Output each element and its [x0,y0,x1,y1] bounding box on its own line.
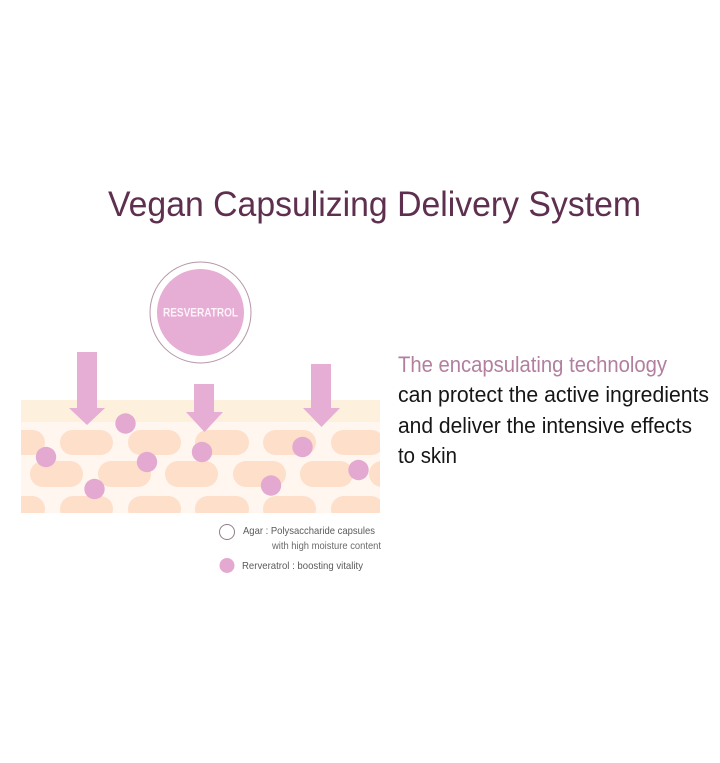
description text: The encapsulating technology [398,352,667,377]
description text: can protect the active ingredients [398,382,709,407]
resveratrol badge [150,262,251,363]
arrow: left [69,352,105,425]
description text [398,352,709,468]
arrow: right [303,364,340,427]
legend: agar: Agar : Polysaccharide capsules [243,525,375,537]
description text: and deliver the intensive effects [398,413,692,438]
resveratrol particles [36,413,369,499]
resveratrol badge: RESVERATROL [163,308,238,320]
title: Vegan Capsulizing Delivery System [108,185,641,224]
arrow: center [186,384,223,432]
skin layers diagram [21,400,380,513]
description text: to skin [398,443,457,468]
legend: agar: with high moisture content [271,540,381,552]
legend: resveratrol: Rerveratrol : boosting vitality [242,560,364,572]
legend: resveratrol [220,558,364,573]
legend: agar [220,524,381,552]
